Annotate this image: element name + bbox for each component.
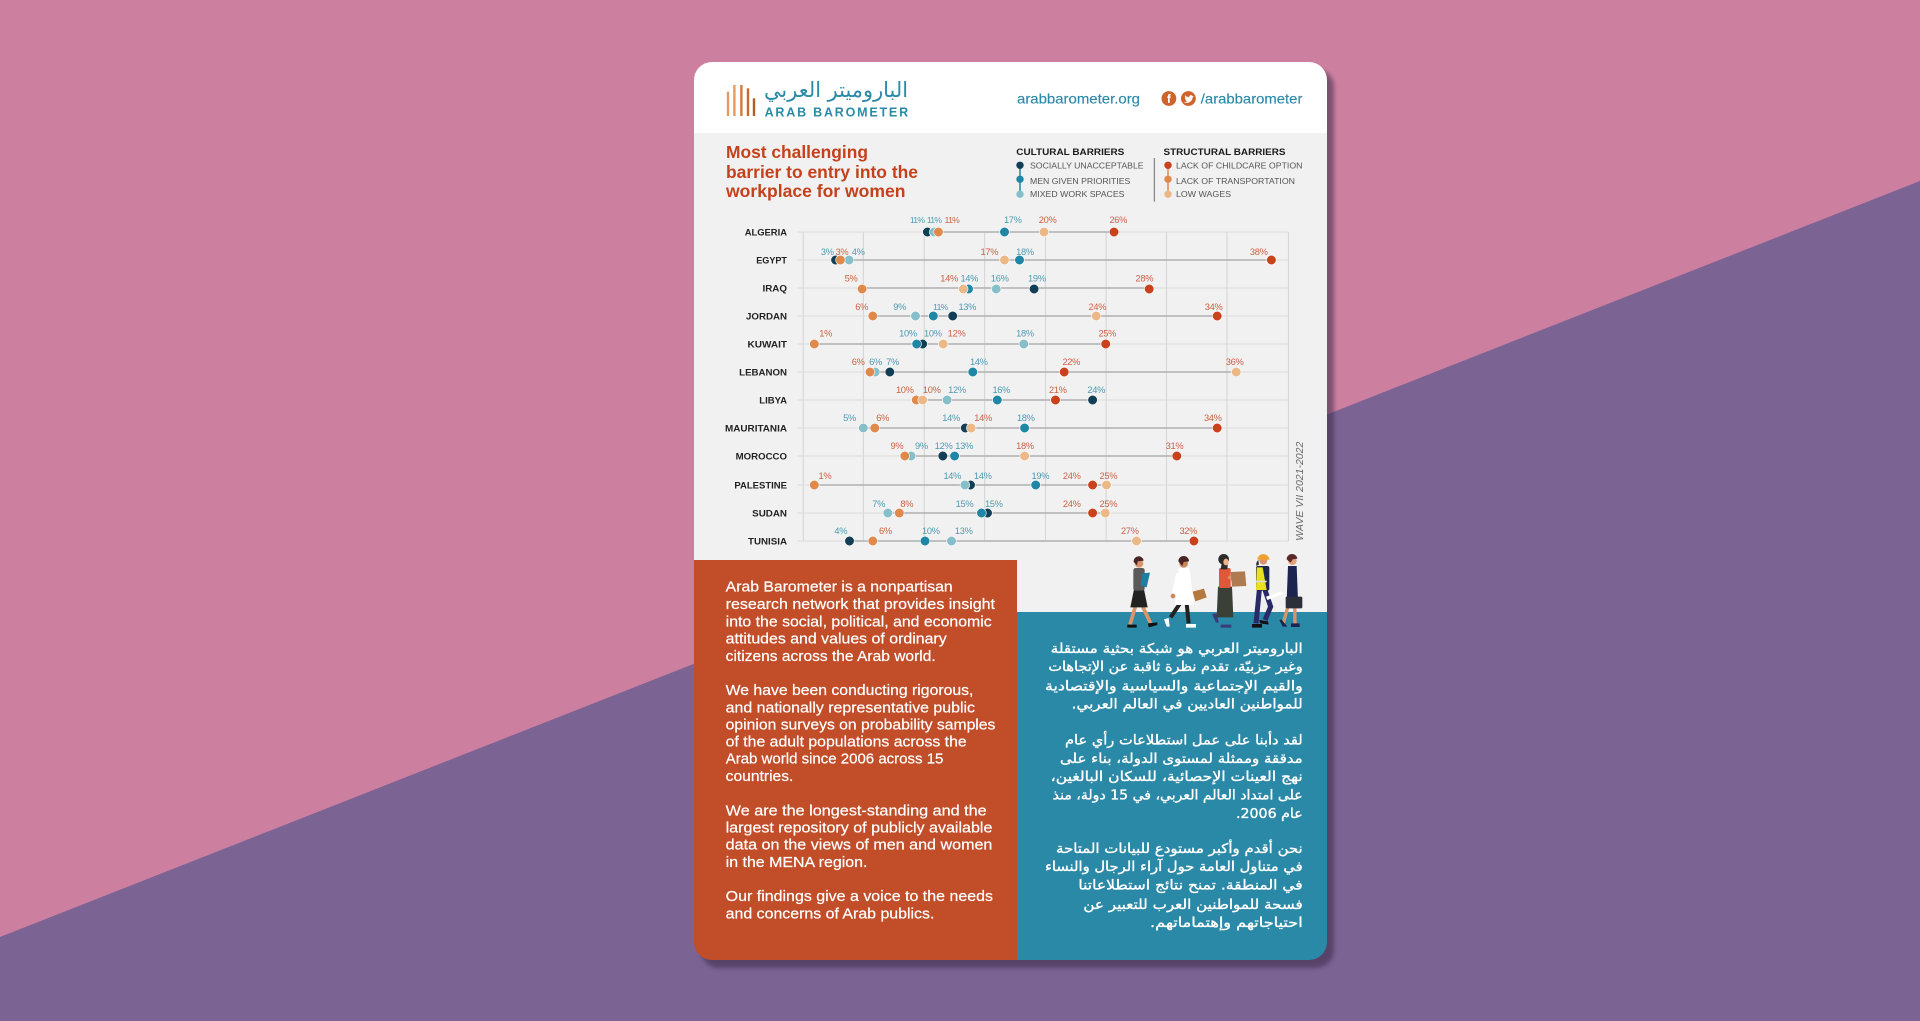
- row: Jordan: 6%: [855, 302, 868, 312]
- icon: facebook: [1162, 91, 1176, 106]
- row: Morocco: 13%: [955, 441, 973, 451]
- row: Algeria: 11%: [945, 215, 960, 225]
- logo arabic name: الباروميتر العربي: [764, 78, 908, 102]
- panel: orange english: [694, 560, 1017, 960]
- title: barrier to entry into the: [726, 162, 918, 182]
- arabic paragraph 1: للمواطنين العاديين في العالم العربي.: [1072, 696, 1303, 712]
- arabic paragraph 3: [1045, 839, 1303, 931]
- title: Most challenging: [726, 142, 868, 162]
- paragraph 2: of the adult populations across the: [726, 734, 967, 751]
- row: Tunisia: TUNISIA: [748, 536, 787, 548]
- row: Tunisia: 13%: [955, 526, 973, 536]
- arabic paragraph 2: [1051, 730, 1303, 822]
- wave label: WAVE VII 2021-2022: [1295, 441, 1306, 541]
- row: Libya: 21%: [1049, 385, 1067, 395]
- row: Egypt: 3%: [821, 247, 834, 257]
- arabic paragraph 3: فسحة للمواطنين العرب للتعبير عن: [1083, 897, 1303, 913]
- arabic paragraph 3: نحن أقدم وأكبر مستودع للبيانات المتاحة: [1056, 839, 1303, 857]
- paragraph 2: and nationally representative public: [726, 699, 976, 716]
- row: Lebanon: 6%: [852, 357, 865, 367]
- row: Kuwait: 18%: [1016, 328, 1034, 338]
- row: Jordan: 34%: [1205, 302, 1222, 312]
- row: Egypt: 3%: [835, 247, 848, 257]
- arabic paragraph 2: لقد دأبنا على عمل استطلاعات رأي عام: [1065, 730, 1303, 748]
- row: Morocco: 31%: [1166, 441, 1183, 451]
- legend: structural barriers: STRUCTURAL BARRIERS: [1164, 147, 1286, 158]
- panel: card: [694, 62, 1327, 960]
- paragraph 3: data on the views of men and women: [726, 837, 992, 854]
- legend: structural barriers: LACK OF CHILDCARE OPTION: [1176, 160, 1302, 170]
- row: Iraq: 16%: [991, 274, 1009, 284]
- woman in suit with briefcase: [1279, 554, 1302, 627]
- row: Tunisia: 4%: [834, 526, 847, 536]
- paragraph 3: [726, 802, 992, 871]
- row: Palestine: PALESTINE: [734, 480, 787, 492]
- row: Lebanon: [739, 357, 1243, 378]
- paragraph 3: largest repository of publicly available: [726, 820, 992, 837]
- row: Iraq: 28%: [1136, 274, 1153, 284]
- logo english name: ARAB BAROMETER: [765, 106, 908, 120]
- row: Algeria: 20%: [1039, 215, 1056, 225]
- paragraph 4: and concerns of Arab publics.: [726, 905, 934, 922]
- icon: twitter: [1181, 91, 1196, 106]
- paragraph 1: Arab Barometer is a nonpartisan: [726, 578, 953, 595]
- row: Sudan: SUDAN: [752, 508, 787, 520]
- row: Jordan: 13%: [958, 302, 976, 312]
- legend: cultural barriers: MIXED WORK SPACES: [1030, 189, 1125, 199]
- paragraph 2: [726, 682, 995, 785]
- social handle: /arabbarometer: [1201, 90, 1303, 106]
- row: Jordan: JORDAN: [746, 312, 787, 322]
- row: Morocco: [736, 441, 1183, 462]
- paragraph 4: Our findings give a voice to the needs: [726, 888, 993, 905]
- row: Egypt: [756, 247, 1276, 266]
- row: Algeria: 11%: [910, 215, 925, 225]
- paragraph 1: citizens across the Arab world.: [726, 648, 936, 665]
- paragraph 3: We are the longest-standing and the: [726, 802, 987, 819]
- woman in hijab with box: [1212, 554, 1246, 628]
- row: Egypt: 18%: [1016, 247, 1034, 257]
- row: Palestine: 14%: [974, 471, 992, 481]
- row: Jordan: 24%: [1089, 302, 1106, 312]
- row: Kuwait: 1%: [819, 328, 832, 338]
- row: Morocco: 18%: [1016, 441, 1034, 451]
- row: Sudan: 7%: [872, 499, 885, 509]
- row: Kuwait: 10%: [899, 328, 917, 338]
- row: Sudan: [752, 499, 1117, 520]
- legend: structural barriers: [1164, 147, 1302, 199]
- paragraph 1: attitudes and values of ordinary: [726, 631, 947, 648]
- row: Iraq: [762, 274, 1154, 294]
- arabic paragraph 1: وغير حزبيّة، تقدم نظرة ثاقبة عن الإتجاهات: [1048, 659, 1303, 675]
- row: Algeria: ALGERIA: [745, 228, 787, 238]
- row: Algeria: 11%: [927, 215, 942, 225]
- row: Tunisia: 10%: [922, 526, 940, 536]
- row: Tunisia: [748, 526, 1199, 548]
- row: Kuwait: KUWAIT: [748, 340, 787, 350]
- row: Jordan: 11%: [933, 302, 949, 312]
- dot chart: [725, 215, 1288, 548]
- row: Mauritania: [725, 413, 1222, 434]
- legend: cultural barriers: SOCIALLY UNACCEPTABLE: [1030, 160, 1144, 170]
- paragraph 2: opinion surveys on probability samples: [726, 716, 995, 733]
- row: Egypt: EGYPT: [756, 256, 787, 266]
- row: Morocco: 9%: [915, 441, 928, 451]
- paragraph 1: research network that provides insight: [726, 596, 996, 613]
- row: Lebanon: LEBANON: [739, 368, 787, 378]
- row: Kuwait: 25%: [1098, 328, 1116, 338]
- row: Palestine: 19%: [1032, 471, 1049, 481]
- row: Tunisia: 6%: [879, 526, 892, 536]
- row: Sudan: 24%: [1063, 499, 1081, 509]
- row: Morocco: MOROCCO: [736, 452, 787, 462]
- row: Mauritania: 18%: [1017, 413, 1035, 423]
- legend: cultural barriers: CULTURAL BARRIERS: [1016, 147, 1124, 158]
- row: Libya: 16%: [992, 385, 1010, 395]
- paragraph 2: We have been conducting rigorous,: [726, 682, 973, 699]
- row: Jordan: [746, 302, 1222, 322]
- title: workplace for women: [725, 181, 906, 201]
- row: Sudan: 8%: [900, 499, 913, 509]
- website link: arabbarometer.org: [1017, 90, 1140, 106]
- row: Mauritania: MAURITANIA: [725, 424, 787, 434]
- row: Egypt: 4%: [852, 247, 865, 257]
- row: Sudan: 25%: [1100, 499, 1117, 509]
- row: Egypt: 38%: [1250, 247, 1268, 257]
- woman with hard hat and vest: [1252, 554, 1283, 628]
- row: Iraq: 14%: [940, 274, 958, 284]
- legend: cultural barriers: [1016, 147, 1144, 199]
- row: Palestine: 25%: [1100, 471, 1117, 481]
- woman in lab coat: [1164, 556, 1207, 628]
- row: Sudan: 15%: [985, 499, 1003, 509]
- arabic paragraph 2: عام 2006.: [1236, 806, 1303, 822]
- arabic paragraph 1: [1045, 641, 1303, 712]
- row: Libya: [759, 385, 1105, 406]
- row: Libya: 12%: [948, 385, 966, 395]
- row: Palestine: 24%: [1063, 471, 1081, 481]
- row: Jordan: 9%: [893, 302, 906, 312]
- arabic paragraph 3: في متناول العامة حول آراء الرجال والنساء: [1045, 858, 1303, 875]
- logo: [728, 78, 908, 120]
- arabic paragraph 2: مدققة وممثلة لمستوى الدولة، بناء على: [1060, 751, 1303, 767]
- row: Algeria: 17%: [1004, 215, 1022, 225]
- paragraph 3: in the MENA region.: [726, 854, 867, 871]
- row: Mauritania: 6%: [876, 413, 889, 423]
- woman with folder: [1127, 556, 1157, 628]
- legend: cultural barriers: MEN GIVEN PRIORITIES: [1030, 176, 1131, 186]
- row: Palestine: [734, 471, 1117, 492]
- row: Kuwait: 12%: [948, 328, 965, 338]
- row: Lebanon: 6%: [869, 357, 882, 367]
- arabic paragraph 1: والقيم الإجتماعية والسياسية والإقتصادية: [1045, 678, 1303, 694]
- paragraph 4: [726, 888, 993, 922]
- row: Libya: 10%: [923, 385, 941, 395]
- arabic paragraph 3: احتياجاتهم وإهتماماتهم.: [1150, 915, 1303, 931]
- panel: teal arabic: [1017, 612, 1327, 960]
- paragraph 1: [726, 578, 996, 665]
- row: Iraq: 14%: [960, 274, 978, 284]
- title: [725, 142, 918, 201]
- logo bars: [728, 85, 754, 116]
- card shadow: [701, 69, 1334, 968]
- row: Mauritania: 14%: [942, 413, 960, 423]
- row: Libya: 10%: [896, 385, 914, 395]
- legend: structural barriers: LOW WAGES: [1176, 189, 1231, 199]
- arabic paragraph 3: في المنطقة. تمنح نتائج استطلاعاتنا: [1078, 878, 1303, 894]
- paragraph 1: into the social, political, and economic: [726, 613, 992, 630]
- row: Libya: 24%: [1087, 385, 1105, 395]
- row: Iraq: 5%: [845, 274, 857, 284]
- row: Palestine: 1%: [818, 471, 831, 481]
- icon: facebook: f: [1167, 92, 1172, 106]
- row: Iraq: IRAQ: [762, 284, 787, 294]
- header band: [694, 62, 1327, 133]
- arabic paragraph 1: الباروميتر العربي هو شبكة بحثية مستقلة: [1051, 641, 1303, 657]
- legend: structural barriers: LACK OF TRANSPORTATION: [1176, 176, 1295, 186]
- row: Morocco: 9%: [890, 441, 903, 451]
- row: Libya: LIBYA: [759, 396, 787, 406]
- row: Algeria: 26%: [1109, 215, 1127, 225]
- arabic paragraph 2: نهج العينات الإحصائية، للسكان البالغين،: [1051, 769, 1303, 785]
- row: Iraq: 19%: [1028, 274, 1046, 284]
- row: Lebanon: 22%: [1062, 357, 1080, 367]
- row: Tunisia: 32%: [1179, 526, 1197, 536]
- row: Algeria: [745, 215, 1127, 238]
- chart background: [694, 133, 1327, 612]
- arabic paragraph 2: على امتداد العالم العربي، في 15 دولة، منذ: [1053, 788, 1303, 804]
- row: Kuwait: [748, 328, 1116, 350]
- row: Morocco: 12%: [935, 441, 952, 451]
- row: Mauritania: 14%: [974, 413, 992, 423]
- row: Mauritania: 34%: [1204, 413, 1222, 423]
- row: Lebanon: 7%: [886, 357, 899, 367]
- row: Mauritania: 5%: [843, 413, 856, 423]
- row: Palestine: 14%: [943, 471, 961, 481]
- illustration: five working women: [1127, 554, 1302, 628]
- paragraph 2: countries.: [726, 768, 793, 785]
- row: Egypt: 17%: [981, 247, 998, 257]
- row: Lebanon: 14%: [970, 357, 988, 367]
- row: Sudan: 15%: [956, 499, 973, 509]
- paragraph 2: Arab world since 2006 across 15: [726, 751, 943, 768]
- row: Kuwait: 10%: [924, 328, 942, 338]
- row: Tunisia: 27%: [1121, 526, 1139, 536]
- row: Lebanon: 36%: [1226, 357, 1243, 367]
